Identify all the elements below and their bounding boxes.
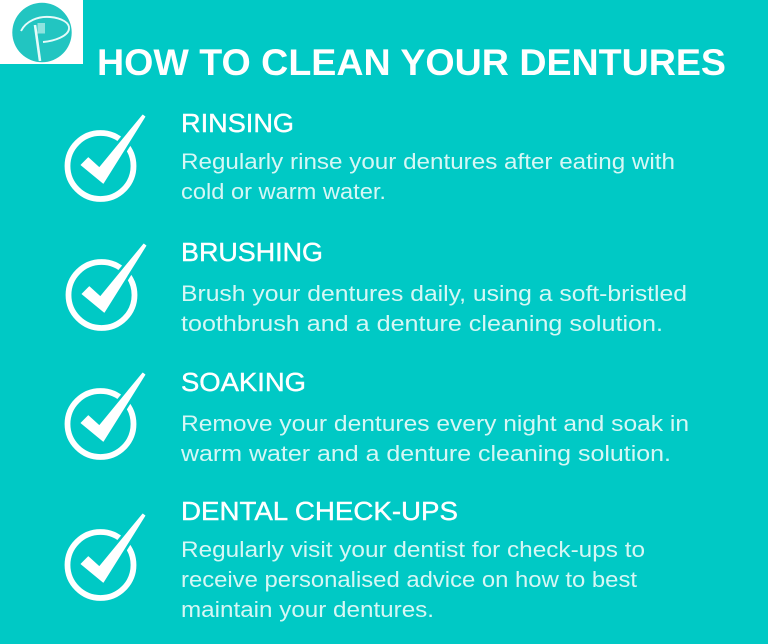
icon: check mark in circle [68,244,146,328]
text: dental check-ups description: maintain your dentures. [181,597,434,622]
text: rinsing description: cold or warm water. [181,179,386,204]
heading: dental check-ups: DENTAL CHECK-UPS [181,496,458,526]
item: soaking [68,367,689,466]
text: soaking description [180,411,689,466]
text: brushing description: toothbrush and a denture cleaning solution. [181,311,663,336]
text: rinsing description: Regularly rinse your dentures after eating with [181,149,675,174]
item: dental check-ups [68,496,645,622]
text: rinsing description [181,149,675,204]
text: brushing description: Brush your dentures daily, using a soft-bristled [181,281,687,306]
heading: rinsing: RINSING [181,108,294,138]
heading: soaking: SOAKING [181,367,306,397]
icon: check mark in circle [68,373,145,457]
item: brushing [68,237,687,336]
logo [0,0,83,64]
icon: check mark in circle [68,514,145,598]
text: dental check-ups description: receive personalised advice on how to best [181,567,637,592]
text: dental check-ups description [181,537,645,622]
text: dental check-ups description: Regularly visit your dentist for check-ups to [181,537,645,562]
text: soaking description: Remove your dentures every night and soak in [181,411,689,436]
icon: check mark in circle [68,115,145,199]
heading: brushing: BRUSHING [181,237,323,267]
item: rinsing [68,108,675,204]
text: soaking description: warm water and a denture cleaning solution. [180,441,671,466]
text: brushing description [181,281,687,336]
title: HOW TO CLEAN YOUR DENTURES [97,42,726,83]
